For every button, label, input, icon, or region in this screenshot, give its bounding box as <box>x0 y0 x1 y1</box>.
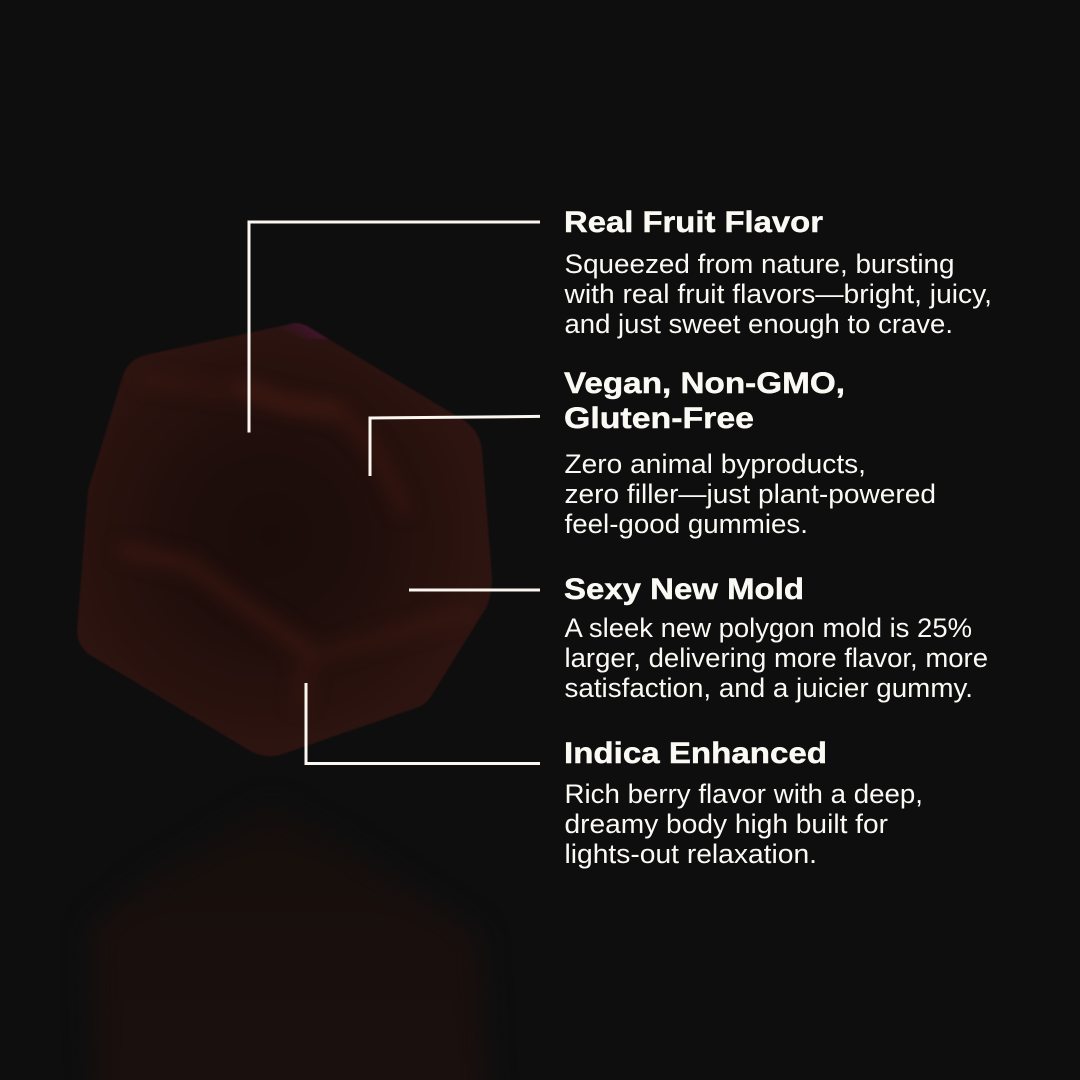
description: sexy new mold <box>564 613 988 703</box>
feature: vegan, non-gmo, gluten-free <box>564 367 936 539</box>
heading: vegan, non-gmo, gluten-free <box>564 367 845 435</box>
gummy illustration <box>76 322 492 756</box>
description: vegan, non-gmo, gluten-free <box>564 449 936 539</box>
feature: real fruit flavor <box>563 206 992 339</box>
description: sexy new mold: satisfaction, and a juicier gummy. <box>564 673 973 703</box>
heading: real fruit flavor: Real Fruit Flavor <box>564 206 823 239</box>
description: real fruit flavor: Squeezed from nature, bursting <box>564 249 954 279</box>
feature: indica enhanced <box>564 737 923 869</box>
description: sexy new mold: larger, delivering more flavor, more <box>564 643 988 673</box>
feature: sexy new mold <box>564 573 988 703</box>
heading: vegan, non-gmo, gluten-free: Gluten-Free <box>564 402 754 435</box>
leader line: sexy new mold <box>409 588 540 592</box>
description: real fruit flavor <box>563 249 992 339</box>
description: real fruit flavor: with real fruit flavors—bright, juicy, <box>563 279 992 309</box>
reflection of gummy <box>92 805 488 1080</box>
description: sexy new mold: A sleek new polygon mold is 25% <box>564 613 972 643</box>
heading: vegan, non-gmo, gluten-free: Vegan, Non-GMO, <box>564 367 845 400</box>
description: indica enhanced: dreamy body high built for <box>564 809 888 839</box>
leader line: indica enhanced <box>306 683 540 764</box>
heading: sexy new mold: Sexy New Mold <box>564 573 804 606</box>
leader line: vegan, non-gmo, gluten-free <box>370 416 540 476</box>
description: vegan, non-gmo, gluten-free: Zero animal byproducts, <box>564 449 866 479</box>
description: indica enhanced: Rich berry flavor with a deep, <box>564 779 923 809</box>
leader line: real fruit flavor <box>249 222 540 432</box>
description: real fruit flavor: and just sweet enough to crave. <box>564 309 953 339</box>
description: indica enhanced <box>564 779 923 869</box>
description: vegan, non-gmo, gluten-free: zero filler—just plant-powered <box>564 479 936 509</box>
heading: indica enhanced: Indica Enhanced <box>564 737 827 770</box>
description: indica enhanced: lights-out relaxation. <box>564 839 817 869</box>
description: vegan, non-gmo, gluten-free: feel-good gummies. <box>564 509 808 539</box>
